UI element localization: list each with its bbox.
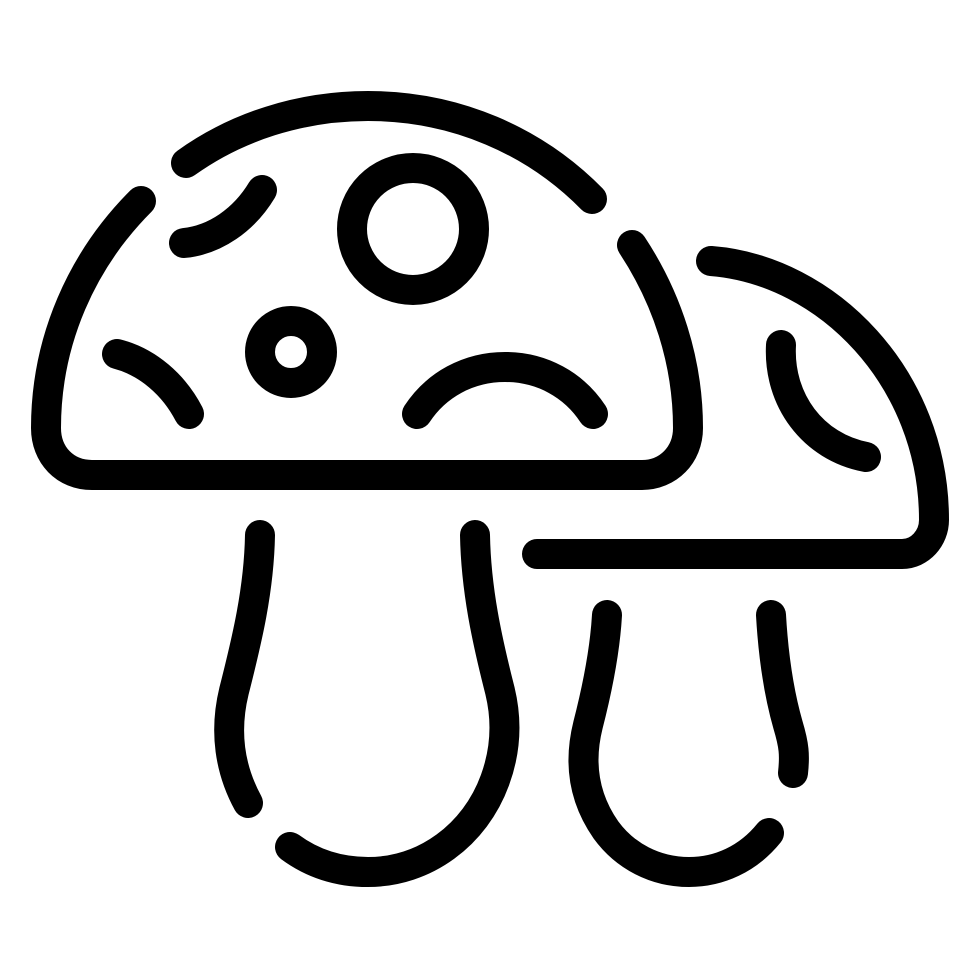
large spot [352, 168, 474, 290]
large mushroom [46, 106, 688, 872]
large cap left side and base [46, 201, 688, 475]
large stem right and bottom [290, 535, 504, 872]
central arch streak [417, 367, 593, 414]
large cap right-hand marking: top left streak [184, 190, 262, 243]
small stem right [771, 615, 794, 773]
large cap top arc [186, 106, 592, 199]
large stem left [229, 535, 260, 803]
small stem left and bottom [584, 615, 769, 872]
small cap outline [537, 261, 934, 554]
small spot [260, 321, 322, 383]
small mushroom [537, 261, 934, 872]
small cap streak [781, 345, 866, 457]
left lower streak [117, 354, 189, 414]
